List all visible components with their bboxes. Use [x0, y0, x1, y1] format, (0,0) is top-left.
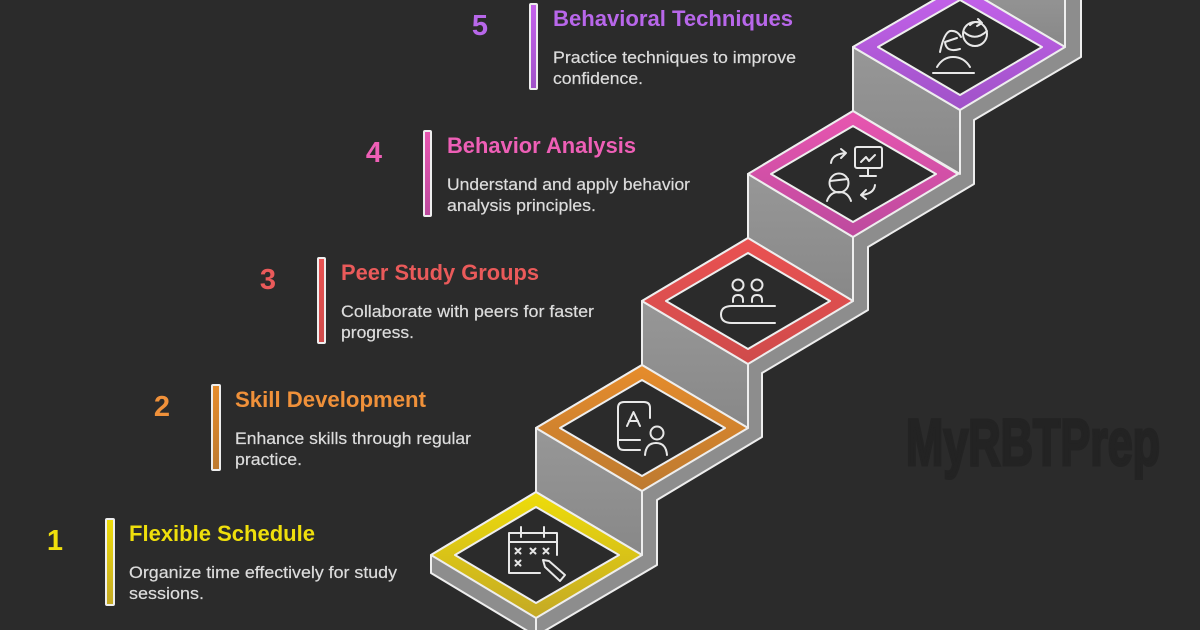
- heading 4: Behavior Analysis: [447, 133, 636, 158]
- heading 5: Behavioral Techniques: [553, 6, 793, 31]
- step 3 riser: [748, 174, 853, 301]
- icon: analysis: [827, 147, 882, 201]
- description 5: confidence.: [553, 70, 643, 88]
- description 1: Organize time effectively for study: [129, 564, 398, 582]
- step 3 tile: [642, 238, 853, 364]
- number 4: 4: [366, 137, 382, 169]
- accent bar 2: [212, 385, 220, 470]
- edge lines: [535, 618, 537, 630]
- icon: book and person: [618, 402, 667, 455]
- description 1: sessions.: [129, 585, 204, 603]
- icon: techniques: [933, 19, 987, 73]
- accent bar 5: [530, 4, 537, 89]
- step 5 tile: [853, 0, 1065, 110]
- accent bar 4: [424, 131, 431, 216]
- heading 3: Peer Study Groups: [341, 260, 539, 285]
- description 2: Enhance skills through regular: [235, 430, 472, 448]
- icon: calendar and pen: [509, 527, 565, 581]
- accent bar 3: [318, 258, 325, 343]
- item 2: Skill Development: [154, 385, 472, 470]
- step 2 tile: [536, 365, 748, 491]
- item 5: Behavioral Techniques: [472, 4, 796, 89]
- description 5: Practice techniques to improve: [553, 49, 796, 67]
- heading 1: Flexible Schedule: [129, 521, 315, 546]
- accent bar 1: [106, 519, 114, 605]
- step 1 riser: [536, 428, 642, 555]
- item 3: Peer Study Groups: [260, 258, 595, 343]
- staircase side silhouette: [431, 0, 1081, 630]
- heading 2: Skill Development: [235, 387, 427, 412]
- step 4 tile: [748, 111, 958, 237]
- step 4 riser: [853, 47, 960, 174]
- description 3: progress.: [341, 324, 414, 342]
- step 5 riser: [960, 0, 1065, 47]
- number 1: 1: [47, 525, 63, 557]
- description 3: Collaborate with peers for faster: [341, 303, 595, 321]
- step 2 riser: [642, 301, 748, 428]
- number 2: 2: [154, 391, 170, 423]
- number 3: 3: [260, 264, 276, 296]
- description 4: analysis principles.: [447, 197, 596, 215]
- number 5: 5: [472, 10, 488, 42]
- description 4: Understand and apply behavior: [447, 176, 691, 194]
- icon: study group: [721, 280, 775, 323]
- step 1 tile: [431, 492, 642, 618]
- description 2: practice.: [235, 451, 302, 469]
- item 4: Behavior Analysis: [366, 131, 691, 216]
- item 1: Flexible Schedule: [47, 519, 398, 605]
